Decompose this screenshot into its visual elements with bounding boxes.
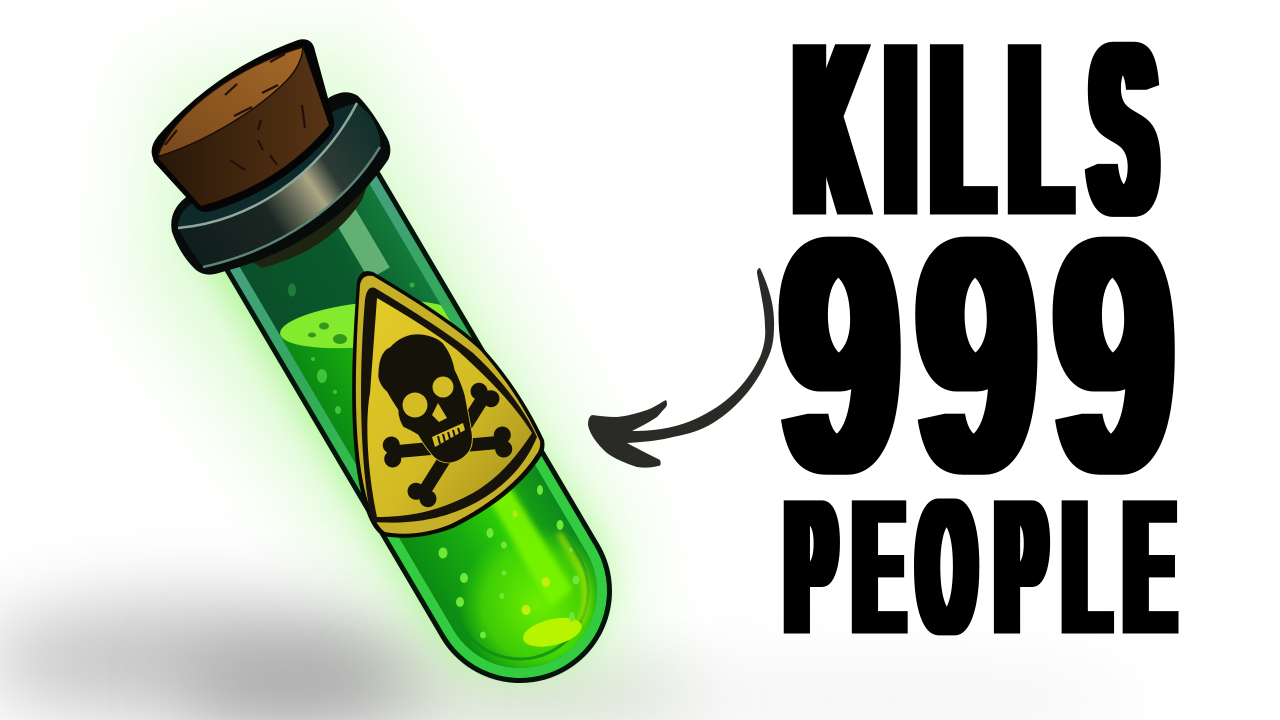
crossbones	[382, 380, 513, 510]
glass tube	[224, 172, 612, 683]
cork texture	[165, 54, 305, 170]
headline word: PEOPLE: PEOPLE	[787, 459, 1173, 674]
headline number: 999: 999	[781, 169, 1173, 543]
collar	[171, 92, 390, 275]
bubbles	[288, 282, 580, 638]
skull	[378, 334, 472, 463]
headline word: KILLS: KILLS	[796, 0, 1154, 267]
cork	[152, 39, 334, 212]
green glow around vial	[130, 30, 630, 680]
curved arrow	[588, 268, 774, 468]
grey smoke at the bottom	[0, 602, 1140, 720]
vial	[152, 39, 612, 683]
liquid	[280, 302, 597, 668]
headline	[781, 0, 1173, 674]
warning label	[352, 271, 544, 538]
glass highlight	[318, 181, 390, 280]
neck shadow	[236, 172, 372, 268]
